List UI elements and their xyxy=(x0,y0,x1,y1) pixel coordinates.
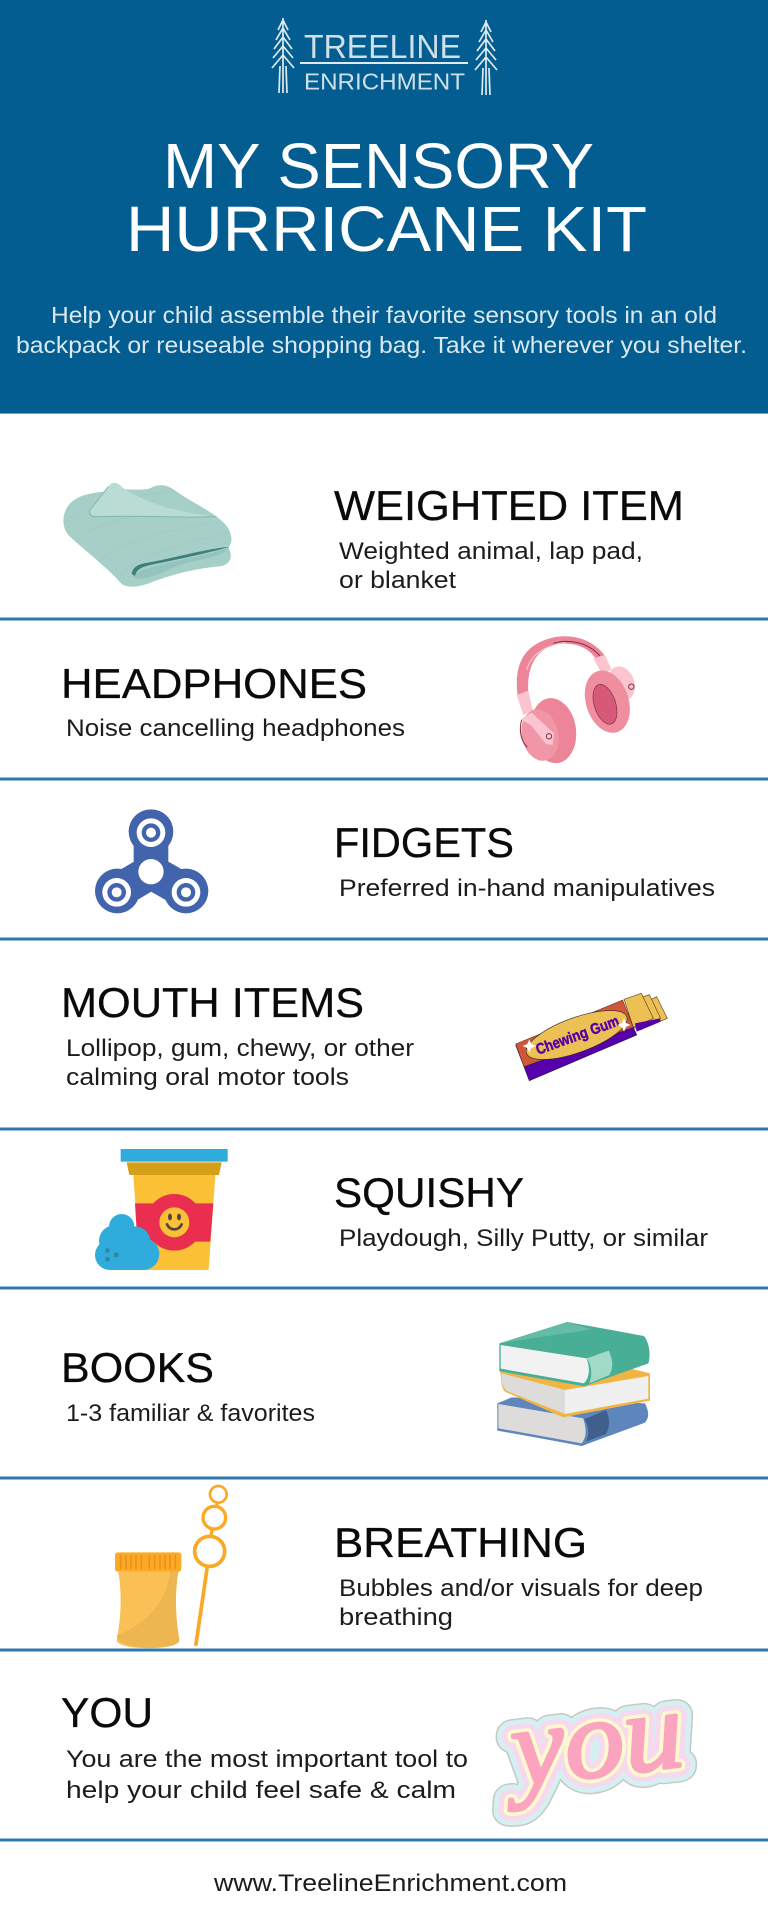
description: Weighted animal, lap pad, xyxy=(339,538,643,565)
intro text xyxy=(16,302,747,358)
panel: you xyxy=(61,1667,690,1813)
panel: headphones xyxy=(61,636,639,766)
logo: Treeline Enrichment: TREELINE xyxy=(304,28,461,65)
title: HURRICANE KIT xyxy=(126,193,647,265)
panel: books xyxy=(61,1322,650,1446)
description: calming oral motor tools xyxy=(66,1064,349,1091)
heading: SQUISHY xyxy=(334,1169,524,1216)
title xyxy=(126,130,647,265)
icon: headphones xyxy=(517,636,639,766)
icon: fidget spinner xyxy=(95,809,208,913)
heading: WEIGHTED ITEM xyxy=(334,482,684,529)
heading: YOU xyxy=(61,1689,153,1736)
panel: squishy xyxy=(95,1149,708,1270)
icon: you sticker: you xyxy=(493,1667,690,1813)
panel: mouth items xyxy=(61,979,667,1091)
description: Preferred in-hand manipulatives xyxy=(339,875,715,902)
heading: FIDGETS xyxy=(334,819,514,866)
description: breathing xyxy=(339,1604,453,1631)
panel: header xyxy=(0,0,768,414)
description: or blanket xyxy=(339,567,456,594)
heading: HEADPHONES xyxy=(61,660,367,707)
title: MY SENSORY xyxy=(163,130,594,202)
description: Bubbles and/or visuals for deep xyxy=(339,1575,703,1602)
panel: fidgets xyxy=(95,809,715,913)
description xyxy=(339,1575,703,1631)
footer: website: www.TreelineEnrichment.com xyxy=(213,1870,567,1897)
description: You are the most important tool to xyxy=(66,1746,468,1773)
icon: bubbles jar and wand xyxy=(115,1486,227,1648)
icon: stack of books xyxy=(497,1322,650,1446)
heading: MOUTH ITEMS xyxy=(61,979,364,1026)
description: Playdough, Silly Putty, or similar xyxy=(339,1225,708,1252)
description: Lollipop, gum, chewy, or other xyxy=(66,1035,414,1062)
description xyxy=(66,1035,414,1091)
intro text: Help your child assemble their favorite sensory tools in an old xyxy=(51,302,717,328)
icon: chewing gum pack: Chewing Gum xyxy=(534,1013,622,1059)
intro text: backpack or reuseable shopping bag. Take it wherever you shelter. xyxy=(16,332,747,358)
description xyxy=(339,538,643,594)
icon: you sticker: you xyxy=(493,1667,690,1813)
icon: you sticker: you xyxy=(493,1667,690,1813)
description xyxy=(66,1746,468,1804)
icon: you sticker: you xyxy=(493,1667,690,1813)
heading: BREATHING xyxy=(334,1519,587,1566)
icon: playdough tub xyxy=(95,1149,228,1270)
description: 1-3 familiar & favorites xyxy=(66,1400,315,1427)
heading: BOOKS xyxy=(61,1344,214,1391)
panel: weighted item xyxy=(63,482,684,594)
description: help your child feel safe & calm xyxy=(66,1777,456,1804)
icon: you sticker: you xyxy=(493,1667,690,1813)
icon: chewing gum pack xyxy=(516,993,667,1081)
description: Noise cancelling headphones xyxy=(66,715,405,742)
icon: folded blanket xyxy=(63,483,231,587)
panel: breathing xyxy=(115,1486,703,1648)
logo: Treeline Enrichment: ENRICHMENT xyxy=(304,68,465,94)
logo: Treeline Enrichment xyxy=(272,18,497,95)
